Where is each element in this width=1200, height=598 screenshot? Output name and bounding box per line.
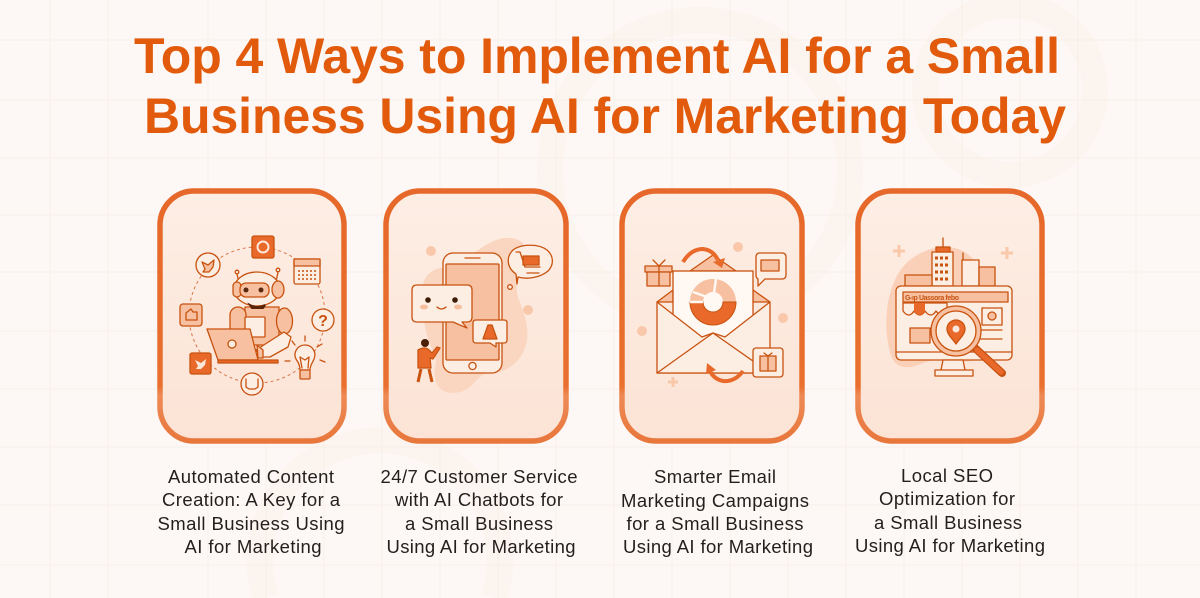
illustration: robot with laptop and social icons — [180, 236, 334, 395]
caption 1: AI for Marketing — [184, 536, 322, 557]
card frame 2 — [386, 191, 566, 441]
illustration: envelope with chart and gifts — [637, 242, 788, 387]
caption 2: 24/7 Customer Service — [380, 466, 578, 487]
illustration: robot with laptop and social icons: ? — [318, 313, 328, 330]
caption 1: Automated Content — [168, 466, 334, 487]
caption 4: a Small Business — [874, 512, 1022, 533]
caption 3: for a Small Business — [626, 513, 804, 534]
card frame 3 — [622, 191, 802, 441]
caption 3: Smarter Email — [654, 466, 776, 487]
caption 2: Using AI for Marketing — [386, 536, 576, 557]
title — [134, 28, 1066, 144]
card frame 1 — [160, 191, 344, 441]
caption 4: Optimization for — [879, 488, 1015, 509]
caption 1: Small Business Using — [158, 513, 344, 534]
caption 4: Using AI for Marketing — [855, 535, 1045, 556]
caption 1: Creation: A Key for a — [162, 489, 341, 510]
illustration: monitor with location pin magnifier: G-ıp Uassora febo — [905, 295, 959, 302]
caption 3: Marketing Campaigns — [621, 490, 809, 511]
caption 3 — [621, 466, 813, 557]
panel: automated content creation — [160, 191, 344, 441]
caption 4 — [855, 465, 1045, 556]
panel: customer service chatbots — [386, 191, 566, 441]
illustration: monitor with location pin magnifier — [886, 238, 1013, 376]
caption 3: Using AI for Marketing — [623, 536, 813, 557]
card frame 4 — [858, 191, 1042, 441]
title: Top 4 Ways to Implement AI for a Small — [134, 28, 1060, 84]
caption 2: a Small Business — [405, 513, 553, 534]
panel: local seo optimization — [858, 191, 1042, 441]
caption 2: with AI Chatbots for — [394, 489, 563, 510]
illustration: smartphone with chat bubbles — [412, 238, 552, 393]
caption 4: Local SEO — [901, 465, 993, 486]
caption 2 — [380, 466, 578, 557]
title: Business Using AI for Marketing Today — [144, 88, 1066, 144]
panel: smarter email marketing — [622, 191, 802, 441]
caption 1 — [158, 466, 344, 557]
